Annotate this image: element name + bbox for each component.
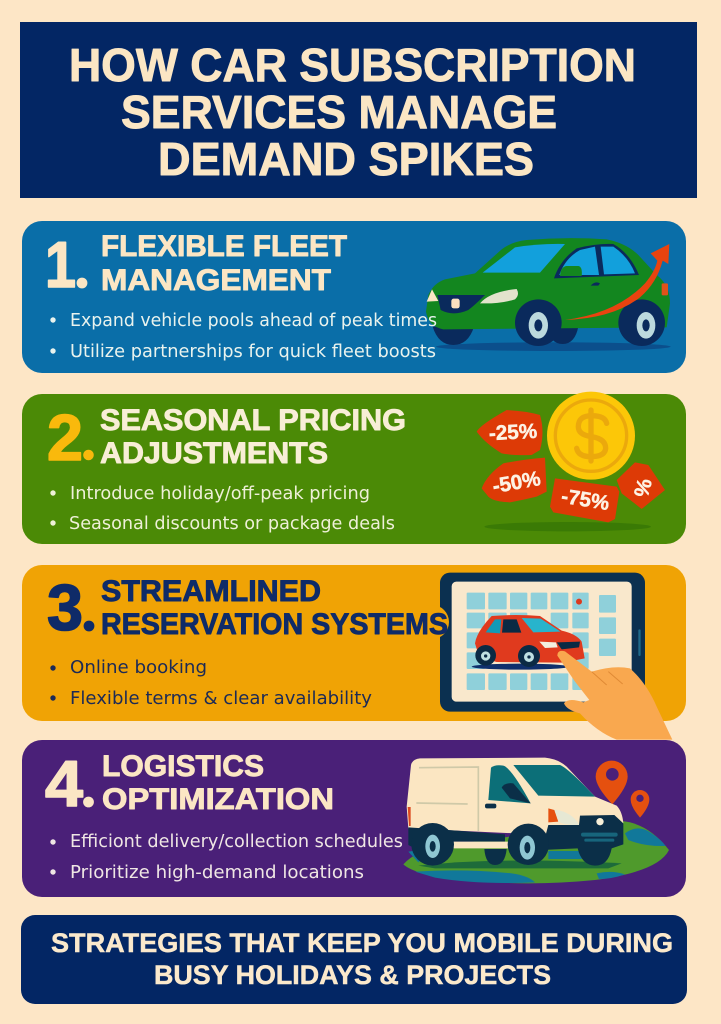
icon: green car with rising arrow <box>426 238 671 351</box>
heading 1: FLEXIBLE FLEET <box>101 230 347 263</box>
panel: streamlined reservation systems <box>22 565 686 740</box>
heading 1 <box>101 230 347 297</box>
bullet list 1 <box>50 311 437 362</box>
bullet list 2: Seasonal discounts or package deals <box>69 514 395 534</box>
heading 2 <box>100 404 406 470</box>
title text <box>69 39 636 185</box>
number 3: 3 <box>47 571 83 644</box>
title banner <box>20 22 697 198</box>
footer text: STRATEGIES THAT KEEP YOU MOBILE DURING <box>51 928 673 958</box>
title text: HOW CAR SUBSCRIPTION <box>69 39 636 91</box>
number 4: 4 <box>45 747 83 820</box>
heading 1: MANAGEMENT <box>101 264 331 297</box>
tablet notch behind heading <box>415 605 449 639</box>
number 1: 1 <box>45 228 76 301</box>
heading 4 <box>102 750 334 816</box>
icon: coin with discount tags: -25% <box>488 420 538 445</box>
heading 3: RESERVATION SYSTEMS <box>101 608 448 641</box>
bullet list 2: Introduce holiday/off-peak pricing <box>70 484 370 504</box>
bullet list 4: Prioritize high-demand locations <box>70 863 364 883</box>
panel: logistics optimization <box>22 740 686 897</box>
icon: tablet with car and hand <box>440 573 672 740</box>
panel: flexible fleet management <box>22 221 686 373</box>
bullet list 1: Utilize partnerships for quick fleet boosts <box>70 342 436 362</box>
icon: delivery van on map with pins <box>403 758 669 883</box>
bullet list 3 <box>50 658 372 709</box>
title text: DEMAND SPIKES <box>158 133 534 185</box>
title text: SERVICES MANAGE <box>121 86 557 138</box>
bullet list 3: Flexible terms & clear availability <box>70 689 372 709</box>
icon: coin with discount tags: -75% <box>560 485 611 515</box>
icon: coin with discount tags: % <box>629 476 656 500</box>
panel: seasonal pricing adjustments <box>22 392 686 544</box>
bullet list 1: Expand vehicle pools ahead of peak times <box>70 311 437 331</box>
heading 3: STREAMLINED <box>101 575 321 608</box>
icon: coin with discount tags <box>477 392 665 531</box>
bullet list 4: Efficiont delivery/collection schedules <box>70 832 403 852</box>
footer text: BUSY HOLIDAYS & PROJECTS <box>154 960 551 990</box>
heading 2: SEASONAL PRICING <box>100 404 406 437</box>
heading 3 <box>101 575 448 641</box>
heading 4: LOGISTICS <box>102 750 264 783</box>
icon: coin with discount tags: -50% <box>491 467 542 498</box>
heading 2: ADJUSTMENTS <box>100 437 328 470</box>
heading 4: OPTIMIZATION <box>102 783 334 816</box>
footer banner <box>21 915 687 1004</box>
bullet list 3: Online booking <box>70 658 207 678</box>
bullet list 2 <box>50 484 395 534</box>
bullet list 4 <box>50 832 403 883</box>
number 2: 2 <box>47 401 83 474</box>
footer text <box>51 928 673 990</box>
